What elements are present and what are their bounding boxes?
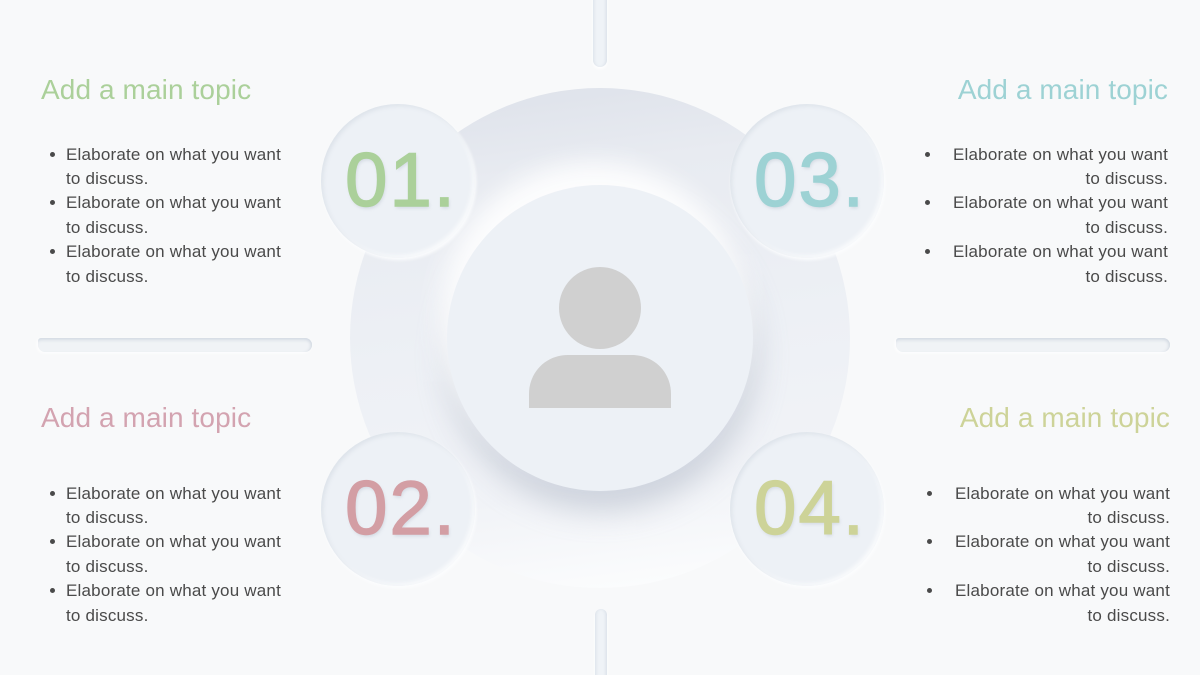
badge 04: 04. <box>754 466 866 551</box>
heading: topic 4: Add a main topic <box>960 402 1170 433</box>
text block: topic 4 <box>927 484 1170 625</box>
badge 02: 02. <box>345 466 457 551</box>
text block: topic 2: Elaborate on what you want <box>66 581 281 600</box>
heading: topic 2: Add a main topic <box>41 402 251 433</box>
text block: topic 2 <box>50 484 281 625</box>
badge 03: 03. <box>754 138 866 223</box>
text block: topic 3: Elaborate on what you want <box>953 144 1168 164</box>
text block: topic 1: Elaborate on what you want <box>66 242 281 261</box>
text block: topic 1: to discuss. <box>66 169 149 188</box>
text block: topic 3 <box>925 144 1168 286</box>
badge 04 <box>730 432 884 586</box>
text block: topic 4: to discuss. <box>1087 606 1170 625</box>
top connector bar <box>593 0 607 67</box>
central ring with person <box>350 88 850 528</box>
text block: topic 3: to discuss. <box>1085 169 1168 188</box>
badge 03 <box>730 104 884 258</box>
right divider bar <box>896 338 1170 352</box>
text block: topic 2: to discuss. <box>66 606 149 625</box>
text block: topic 4: Elaborate on what you want <box>955 532 1170 551</box>
text block: topic 2: to discuss. <box>66 557 149 576</box>
text block: topic 3: to discuss. <box>1085 218 1168 237</box>
left divider bar <box>38 338 312 352</box>
text block: topic 2: to discuss. <box>66 508 149 527</box>
text block: topic 3: to discuss. <box>1085 267 1168 286</box>
text block: topic 1: Elaborate on what you want <box>66 144 281 164</box>
badge 02 <box>321 432 475 586</box>
text block: topic 3: Elaborate on what you want <box>953 193 1168 212</box>
heading: topic 3: Add a main topic <box>958 74 1168 105</box>
text block: topic 1 <box>50 144 281 286</box>
text block: topic 1: Elaborate on what you want <box>66 193 281 212</box>
heading: topic 1: Add a main topic <box>41 74 251 105</box>
text block: topic 1: to discuss. <box>66 267 149 286</box>
text block: topic 4: Elaborate on what you want <box>955 484 1170 502</box>
text block: topic 2: Elaborate on what you want <box>66 484 281 502</box>
text block: topic 4: to discuss. <box>1087 508 1170 527</box>
inner disc <box>447 185 753 491</box>
badge 01: 01. <box>345 138 457 223</box>
text block: topic 3: Elaborate on what you want <box>953 242 1168 261</box>
badge 01 <box>321 104 475 258</box>
text block: topic 4: Elaborate on what you want <box>955 581 1170 600</box>
icon: person <box>529 267 671 408</box>
text block: topic 2: Elaborate on what you want <box>66 532 281 551</box>
bottom connector bar <box>595 609 607 675</box>
outer ring disc <box>350 88 850 528</box>
text block: topic 1: to discuss. <box>66 218 149 237</box>
text block: topic 4: to discuss. <box>1087 557 1170 576</box>
